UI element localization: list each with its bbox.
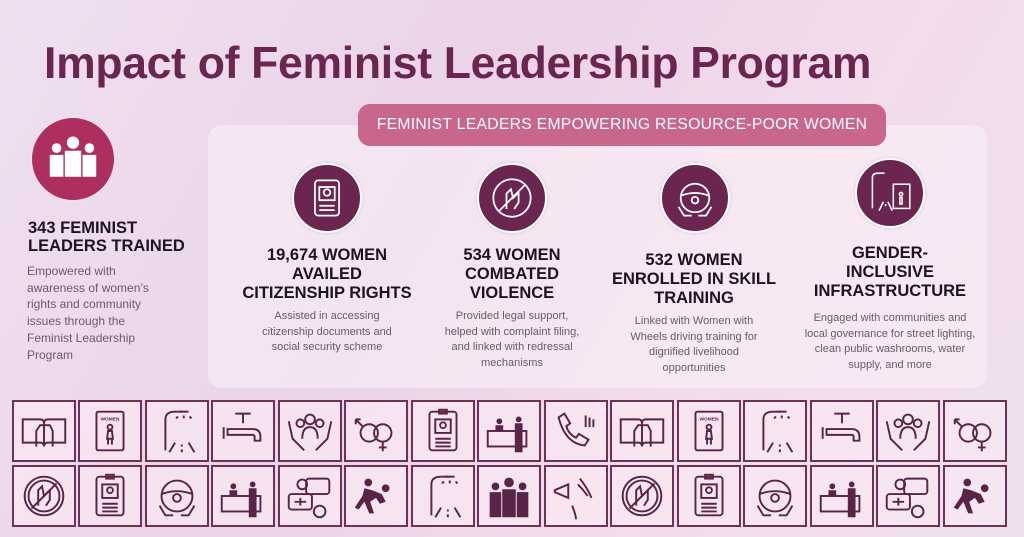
heading: TRAINING bbox=[654, 289, 734, 307]
panel: leaders trained bbox=[27, 118, 185, 362]
heading: VIOLENCE bbox=[470, 284, 554, 302]
text: Program bbox=[27, 348, 73, 362]
text: Wheels driving training for bbox=[630, 330, 758, 342]
heading bbox=[242, 246, 412, 302]
text: Engaged with communities and bbox=[814, 312, 966, 324]
text: awareness of women’s bbox=[27, 281, 149, 295]
heading: 343 FEMINIST bbox=[28, 219, 137, 237]
text: rights and community bbox=[27, 297, 141, 311]
heading: CITIZENSHIP RIGHTS bbox=[242, 284, 412, 302]
panel: main outcomes bbox=[208, 125, 987, 388]
text: mechanisms bbox=[481, 356, 543, 368]
heading: 19,674 WOMEN bbox=[267, 246, 387, 264]
banner bbox=[358, 104, 886, 146]
column: infrastructure bbox=[805, 157, 975, 370]
heading: INCLUSIVE bbox=[846, 263, 934, 281]
banner: FEMINIST LEADERS EMPOWERING RESOURCE-POOR WOMEN bbox=[377, 116, 867, 133]
title: Impact of Feminist Leadership Program bbox=[44, 39, 871, 88]
text: and linked with redressal bbox=[451, 341, 573, 353]
text bbox=[262, 310, 392, 353]
text: helped with complaint filing, bbox=[445, 326, 579, 338]
text: supply, and more bbox=[848, 358, 932, 370]
heading: 534 WOMEN bbox=[463, 246, 561, 264]
icon: no violence bbox=[477, 163, 547, 233]
heading: COMBATED bbox=[465, 265, 559, 283]
text: local governance for street lighting, bbox=[805, 328, 975, 340]
heading: ENROLLED IN SKILL bbox=[612, 270, 776, 288]
heading bbox=[814, 244, 966, 300]
text: Provided legal support, bbox=[456, 310, 568, 322]
heading bbox=[463, 246, 561, 302]
heading: LEADERS TRAINED bbox=[28, 237, 185, 255]
heading bbox=[28, 219, 185, 255]
column: skill training bbox=[612, 162, 776, 374]
text bbox=[27, 264, 149, 362]
heading: GENDER- bbox=[852, 244, 928, 262]
text bbox=[445, 310, 579, 368]
text: Assisted in accessing bbox=[274, 310, 380, 322]
text: Feminist Leadership bbox=[27, 331, 135, 345]
icon: id card bbox=[292, 163, 362, 233]
column: citizenship bbox=[242, 162, 412, 353]
text: Empowered with bbox=[27, 264, 116, 278]
icon: steering wheel bbox=[660, 163, 730, 233]
text: social security scheme bbox=[272, 341, 382, 353]
text: dignified livelihood bbox=[649, 346, 739, 358]
heading: 532 WOMEN bbox=[645, 251, 743, 269]
text: Linked with Women with bbox=[635, 315, 753, 327]
heading bbox=[612, 251, 776, 307]
heading: AVAILED bbox=[292, 265, 362, 283]
text: opportunities bbox=[662, 362, 726, 374]
column: violence bbox=[445, 162, 579, 368]
text: issues through the bbox=[27, 314, 125, 328]
icon: lamp and washroom bbox=[855, 158, 925, 228]
icon: group of women bbox=[30, 116, 116, 202]
text bbox=[630, 315, 758, 374]
text: clean public washrooms, water bbox=[815, 343, 965, 355]
text bbox=[805, 312, 975, 370]
heading: INFRASTRUCTURE bbox=[814, 282, 966, 300]
icon grid bbox=[12, 400, 1007, 527]
text: citizenship documents and bbox=[262, 326, 392, 338]
